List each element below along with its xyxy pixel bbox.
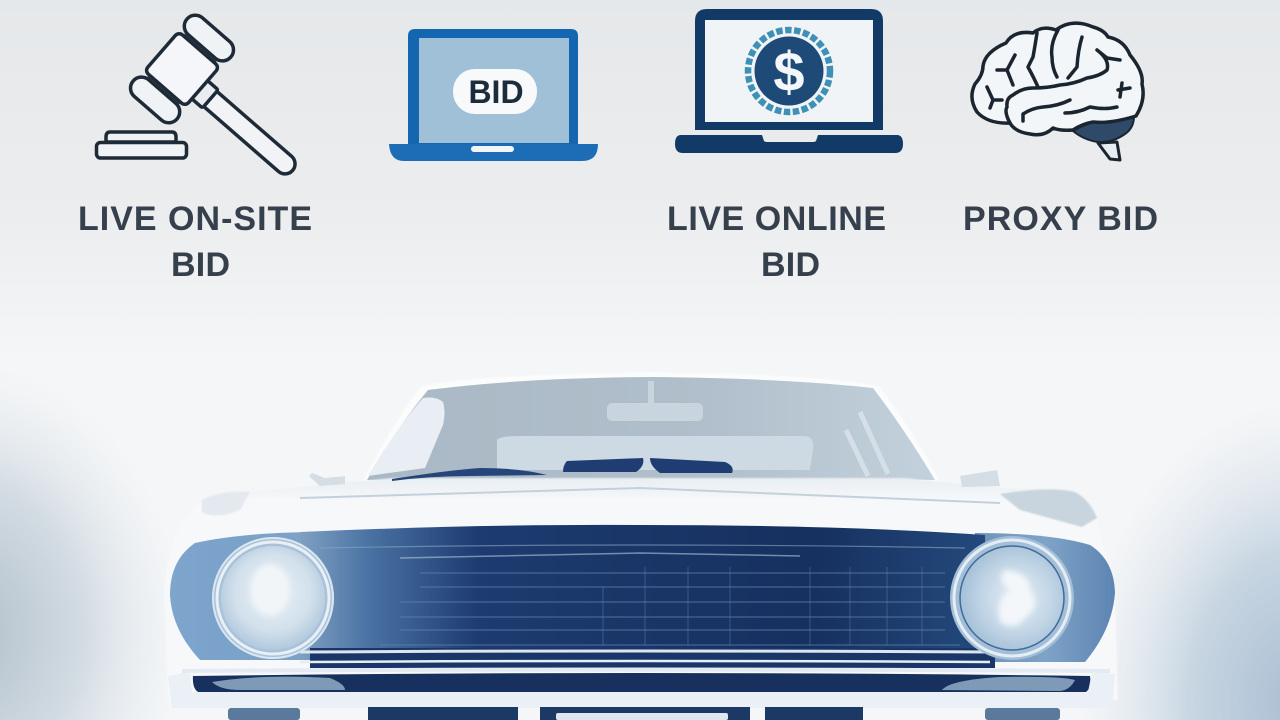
label: live on-site bid: BID — [171, 246, 230, 284]
label: live online bid: LIVE ONLINE — [667, 200, 886, 238]
rear-view mirror — [607, 381, 703, 421]
BID pill — [453, 69, 537, 114]
coin — [754, 36, 824, 106]
car hood — [164, 478, 1118, 700]
left turn signal — [212, 677, 345, 690]
laptop frame — [408, 29, 578, 144]
gavel collar — [190, 79, 218, 108]
brain folds — [987, 30, 1130, 123]
icon: gavel — [96, 11, 329, 207]
hood shadow left — [202, 492, 250, 516]
gavel head — [145, 32, 219, 106]
cowl vent left — [563, 458, 643, 472]
trackpad notch — [471, 146, 514, 152]
car roof and pillars — [362, 372, 940, 482]
right pillar streaks — [846, 412, 888, 476]
interior seat panel — [497, 436, 813, 470]
laptop screen — [705, 20, 873, 122]
label: live on-site bid — [78, 200, 312, 284]
wiper left — [392, 468, 547, 481]
coin ring — [748, 30, 830, 112]
right turn signal — [942, 677, 1075, 691]
gavel dark bands — [182, 30, 219, 65]
grille horizontal bars — [320, 545, 965, 645]
left headlight — [212, 537, 334, 659]
windshield glass — [367, 377, 935, 480]
lower dark band — [193, 673, 1090, 693]
bumper lower recesses — [228, 707, 1060, 720]
bumper bar — [168, 672, 1115, 708]
brain cerebellum — [1073, 116, 1134, 142]
gavel top cap — [180, 11, 238, 65]
right headlight bay — [975, 533, 1115, 662]
label: live online bid — [667, 200, 886, 284]
illustration: classic car front — [164, 372, 1118, 720]
label: live online bid: BID — [761, 246, 820, 284]
gavel base — [106, 132, 176, 142]
gavel mallet — [126, 11, 329, 207]
cowl vent right — [650, 458, 733, 473]
chrome bumper top strips — [182, 651, 1110, 671]
icon: laptop with BID button — [389, 29, 598, 161]
license plate — [556, 713, 728, 720]
dollar sign: $ — [773, 40, 805, 103]
laptop frame — [695, 9, 883, 130]
grille — [300, 525, 985, 660]
gavel bottom cap — [126, 73, 184, 127]
hood crease — [300, 488, 1000, 503]
hood shadow right — [1000, 489, 1097, 527]
windshield reflection — [368, 398, 444, 476]
laptop base — [675, 135, 903, 153]
mirrors — [309, 473, 345, 486]
icon: brain — [972, 23, 1143, 160]
laptop screen — [419, 38, 569, 143]
left headlight bay — [170, 532, 310, 660]
icon: laptop with dollar coin — [675, 9, 903, 153]
label: live on-site bid: LIVE ON-SITE — [78, 200, 312, 238]
brain stem — [1098, 142, 1120, 160]
BID pill text: BID — [468, 74, 524, 110]
brain outline — [972, 23, 1143, 135]
grille vertical bars — [603, 567, 922, 645]
gavel handle — [193, 82, 299, 178]
right headlight — [950, 536, 1074, 660]
laptop base — [389, 144, 598, 161]
label: proxy bid: PROXY BID — [963, 200, 1158, 238]
